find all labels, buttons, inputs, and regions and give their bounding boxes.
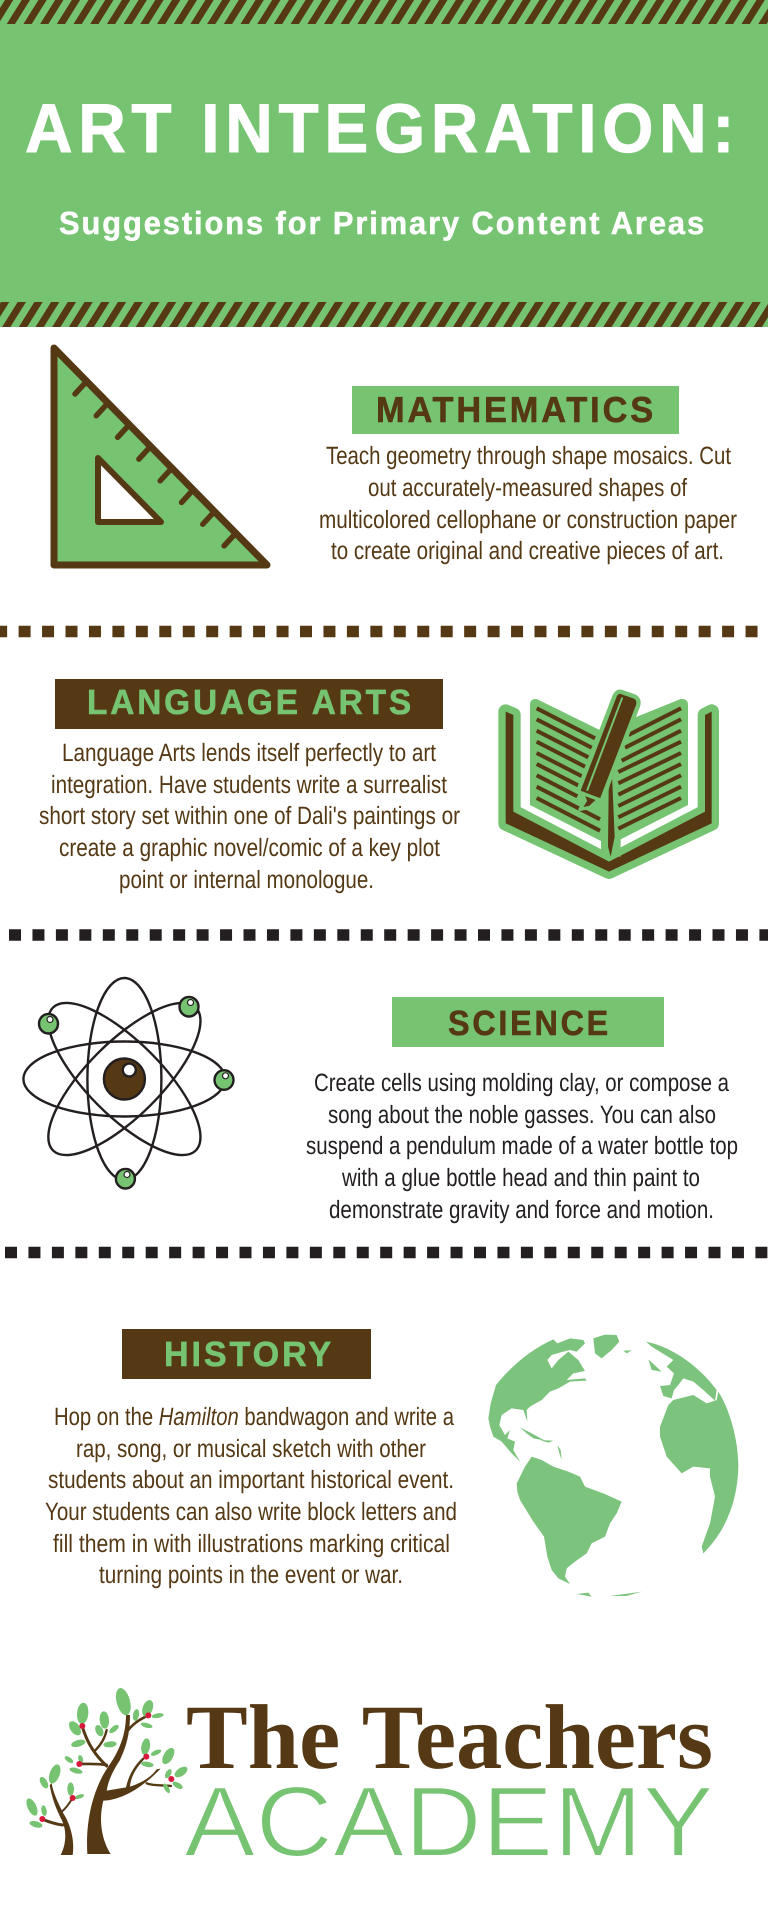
heading: science: SCIENCE [448,1004,611,1043]
text: history body: rap, song, or musical sketch with other [76,1435,426,1463]
text: language arts body: short story set within one of Dali's paintings or [39,802,460,830]
icon: tree [24,1686,189,1855]
text: science body: with a glue bottle head and thin paint to [341,1164,700,1192]
icon: globe [488,1335,738,1597]
text: science body [306,1069,738,1224]
text: history body: Your students can also write block letters and [45,1498,457,1526]
heading: mathematics: MATHEMATICS [376,389,656,430]
logo text: The Teachers: The Teachers [186,1686,713,1788]
panel: mathematics [54,348,737,565]
heading: history [122,1329,371,1379]
text: history body: fill them in with illustrations marking critical [53,1530,450,1558]
heading: history: HISTORY [164,1335,334,1374]
logo: The Teachers Academy [24,1686,714,1878]
icon: atom [23,978,234,1188]
text: language arts body: integration. Have students write a surrealist [51,771,447,799]
text: history body: Hop on the Hamilton bandwagon and write a [54,1403,454,1431]
icon: set square [54,348,267,565]
text: language arts body: point or internal monologue. [119,866,374,894]
header banner [0,0,768,327]
text: mathematics body [319,442,737,565]
panel: history [45,1329,738,1597]
text: language arts body: create a graphic novel/comic of a key plot [59,834,440,862]
heading: language arts: LANGUAGE ARTS [87,683,414,722]
text: language arts body [39,739,460,894]
title: ART INTEGRATION: [25,90,740,167]
logo text: Academy: ACADEMY [184,1766,714,1878]
panel: language arts [39,679,712,894]
text: mathematics body: out accurately-measured shapes of [368,474,687,502]
heading: science [392,997,664,1047]
text: history body: turning points in the event or war. [99,1561,403,1589]
icon: open book with pencil [506,694,712,872]
text: history body: students about an important historical event. [48,1466,454,1494]
heading: language arts [55,679,443,729]
text: language arts body: Language Arts lends itself perfectly to art [62,739,436,767]
panel: science [23,978,738,1224]
subtitle: Suggestions for Primary Content Areas [59,205,706,241]
text: history body [45,1403,457,1589]
